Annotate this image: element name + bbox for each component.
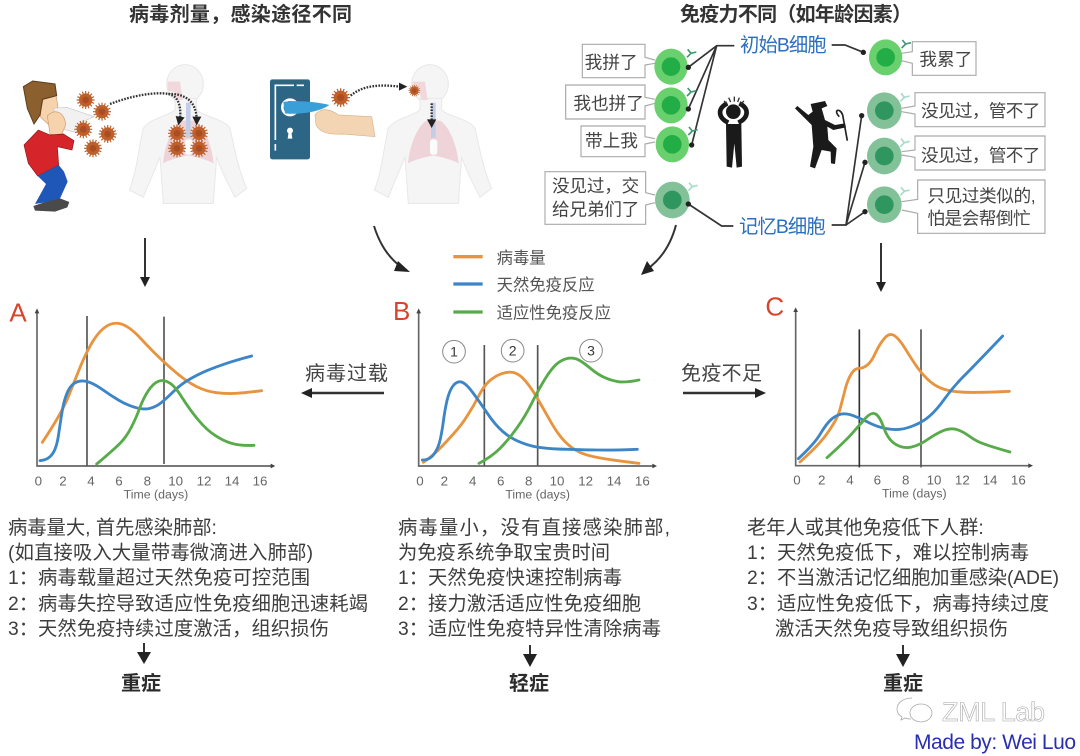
- leader dots: [686, 50, 868, 214]
- tick labels: 6: [497, 473, 504, 488]
- icon: door with handle and hand: [270, 79, 375, 159]
- chart C: [765, 291, 1033, 501]
- curve: viral load: [423, 372, 639, 463]
- curve: adaptive response: [827, 413, 1010, 458]
- arrow: A to outcome: [137, 643, 151, 664]
- panel: immune cells: [545, 34, 1045, 238]
- phase markers: [443, 339, 602, 363]
- arrow: C to outcome: [896, 645, 910, 667]
- title: viral dose and route: 病毒剂量，感染途径不同: [129, 2, 352, 26]
- figure: body with virus at nose: [374, 65, 492, 203]
- tick labels: 2: [818, 473, 825, 488]
- tick labels: 12: [197, 473, 211, 488]
- callout: 只见过类似的，怕是会帮倒忙: 怕是会帮倒忙: [927, 209, 1031, 229]
- phase markers: 1: [450, 344, 458, 360]
- credit: Made by: Wei Luo: [914, 731, 1076, 754]
- figure: coughing man: [23, 81, 94, 212]
- callout: 只见过类似的，怕是会帮倒忙: 只见过类似的,: [927, 186, 1036, 206]
- panel letter A: A: [9, 297, 27, 327]
- arrow: to chart C: [683, 388, 766, 398]
- arrow: to chart A: [301, 388, 384, 398]
- curve: innate response: [40, 356, 252, 461]
- tick labels: 12: [578, 473, 593, 488]
- phase lines: [484, 345, 538, 466]
- tick labels: 8: [902, 473, 909, 488]
- label: naive B cells: 初始B细胞: [740, 34, 827, 56]
- callout: 只见过类似的，怕是会帮倒忙: [902, 180, 1045, 233]
- arrow: immunity down to chart C: [876, 243, 886, 292]
- phase markers: 2: [509, 343, 517, 359]
- title: differing immunity: 免疫力不同（如年龄因素）: [680, 2, 912, 26]
- text block C: 天然免疫低下，难以控制病毒: [777, 542, 1029, 564]
- callout: 我也拼了: [566, 85, 655, 119]
- text block B: 天然免疫快速控制病毒: [428, 567, 622, 589]
- callout: 没见过，交给兄弟们了: 没见过，交: [552, 176, 639, 196]
- text block B: 1：: [398, 568, 428, 589]
- tick labels: 2: [59, 473, 67, 488]
- text block C: 老年人或其他免疫低下人群:: [747, 517, 984, 539]
- figure: body with virus in lungs: [129, 65, 247, 203]
- callout: 没见过，管不了 (1): [902, 93, 1045, 127]
- chart B: [393, 296, 657, 501]
- tick labels: 12: [955, 473, 970, 488]
- panel: infection routes illustration: [23, 65, 492, 212]
- icons: virus particles: [74, 85, 420, 157]
- callout: 我累了: 我累了: [919, 50, 972, 70]
- curve: innate response: [422, 382, 637, 460]
- tick labels: 2: [441, 473, 448, 488]
- icon: elderly dancing figure with cane: [795, 101, 847, 168]
- outcome A: 重症: [121, 672, 161, 695]
- callout: 我也拼了: 我也拼了: [573, 94, 644, 114]
- tick labels: 14: [607, 473, 622, 488]
- tick labels: Time (days): [505, 487, 570, 501]
- text block A: 病毒失控导致适应性免疫细胞迅速耗竭: [38, 593, 368, 615]
- text block A: 3：: [8, 619, 38, 640]
- cells: memory B cells: [655, 92, 910, 223]
- axes: [793, 307, 1033, 468]
- leader lines: [688, 45, 865, 226]
- tick labels: 16: [1011, 473, 1026, 488]
- callout: 带上我: [581, 126, 655, 157]
- text block A: [8, 517, 368, 640]
- arrow: airborne dotted path into lungs: [110, 93, 201, 125]
- tick labels: 16: [635, 473, 650, 488]
- tick labels: Time (days): [882, 487, 947, 501]
- tick labels: 0: [416, 473, 424, 488]
- tick labels: [35, 473, 267, 501]
- tick labels: 16: [253, 473, 267, 488]
- text block B: 3：: [398, 619, 428, 640]
- text block C: 1：: [747, 543, 777, 564]
- watermark: ZML Lab: ZML Lab: [942, 697, 1045, 727]
- arrow: immunity curve to chart B: [641, 225, 676, 275]
- tick labels: 6: [874, 473, 881, 488]
- curve: adaptive response: [479, 358, 639, 463]
- text block C: 不当激活记忆细胞加重感染(ADE): [777, 567, 1059, 589]
- tick labels: 8: [525, 473, 532, 488]
- curve: innate response: [798, 336, 1003, 459]
- legend: [453, 249, 611, 323]
- outcome B: 轻症: [509, 672, 549, 695]
- legend item: adaptive immunity: 适应性免疫反应: [497, 304, 611, 323]
- text block C: [747, 517, 1059, 640]
- callout: 带上我: 带上我: [585, 131, 638, 151]
- callout: 没见过，管不了 (2): 没见过，管不了: [921, 145, 1040, 165]
- axes: [35, 308, 275, 468]
- text block A: (如直接吸入大量带毒微滴进入肺部): [8, 542, 313, 564]
- arrow: B to outcome: [523, 645, 537, 667]
- tick labels: 14: [983, 473, 998, 488]
- tick labels: 10: [927, 473, 941, 488]
- text block B: 2：: [398, 594, 428, 615]
- curve: viral load: [42, 323, 262, 442]
- tick labels: 10: [550, 473, 564, 488]
- tick labels: 0: [35, 473, 42, 488]
- phase markers: 3: [587, 343, 595, 359]
- arrow: routes down to chart A: [140, 238, 150, 287]
- tick labels: [793, 473, 1026, 501]
- phase lines: [859, 329, 921, 467]
- label: memory B cells: 记忆B细胞: [739, 216, 826, 238]
- arrow label: insufficient immunity: 免疫不足: [681, 362, 762, 385]
- text block B: 病毒量小，没有直接感染肺部,: [398, 517, 670, 539]
- arrow label: viral overload: 病毒过载: [305, 362, 388, 385]
- text block C: 3：: [747, 594, 777, 615]
- text block A: 病毒载量超过天然免疫可控范围: [38, 567, 310, 589]
- tick labels: 4: [469, 473, 477, 488]
- text block B: 适应性免疫特异性清除病毒: [428, 618, 661, 640]
- tick labels: 4: [846, 473, 854, 488]
- text block B: 接力激活适应性免疫细胞: [428, 593, 641, 615]
- curve: viral load: [800, 335, 1009, 462]
- chart A: [9, 297, 275, 501]
- callout: 没见过，管不了 (2): [902, 136, 1045, 170]
- legend item: viral load: 病毒量: [497, 249, 546, 267]
- text block C: 2：: [747, 568, 777, 589]
- tick labels: 4: [87, 473, 95, 488]
- text block A: 病毒量大, 首先感染肺部:: [8, 517, 217, 539]
- text block A: 天然免疫持续过度激活，组织损伤: [38, 618, 329, 640]
- callout: 没见过，管不了 (1): 没见过，管不了: [921, 101, 1040, 121]
- icon: stressed person: [720, 97, 747, 168]
- callout: 没见过，交给兄弟们了: 给兄弟们了: [552, 200, 639, 220]
- text block C: 适应性免疫低下，病毒持续过度: [777, 593, 1049, 615]
- tick labels: 10: [168, 473, 183, 488]
- callout: 我拼了: [582, 44, 655, 78]
- curve: adaptive response: [97, 381, 254, 464]
- arrow: contact dotted path to nose: [351, 83, 436, 128]
- panel letter C: C: [765, 291, 784, 321]
- tick labels: 6: [115, 473, 123, 488]
- tick labels: [416, 473, 650, 501]
- tick labels: 14: [225, 473, 240, 488]
- tick labels: 0: [793, 473, 801, 488]
- callout: 我拼了: 我拼了: [585, 52, 638, 72]
- watermark: ZML Lab: [897, 697, 1045, 727]
- axes: [416, 308, 657, 468]
- tick labels: 8: [144, 473, 151, 488]
- text block A: 1：: [8, 568, 38, 589]
- phase lines: [87, 316, 164, 466]
- outcome C: 重症: [883, 672, 923, 695]
- cells: naive B cells: [654, 39, 911, 162]
- arrow: routes curve to chart B: [374, 226, 410, 272]
- tick labels: Time (days): [124, 487, 188, 501]
- legend item: viral load: [453, 249, 546, 267]
- legend item: innate immunity: 天然免疫反应: [497, 276, 595, 295]
- callout: 我累了: [902, 42, 976, 75]
- text block C: 激活天然免疫导致组织损伤: [775, 618, 1008, 640]
- text block B: 为免疫系统争取宝贵时间: [398, 542, 610, 564]
- panel letter B: B: [393, 296, 410, 326]
- text block A: 2：: [8, 594, 38, 615]
- text block B: [398, 517, 670, 640]
- callout: 没见过，交给兄弟们了: [545, 172, 655, 224]
